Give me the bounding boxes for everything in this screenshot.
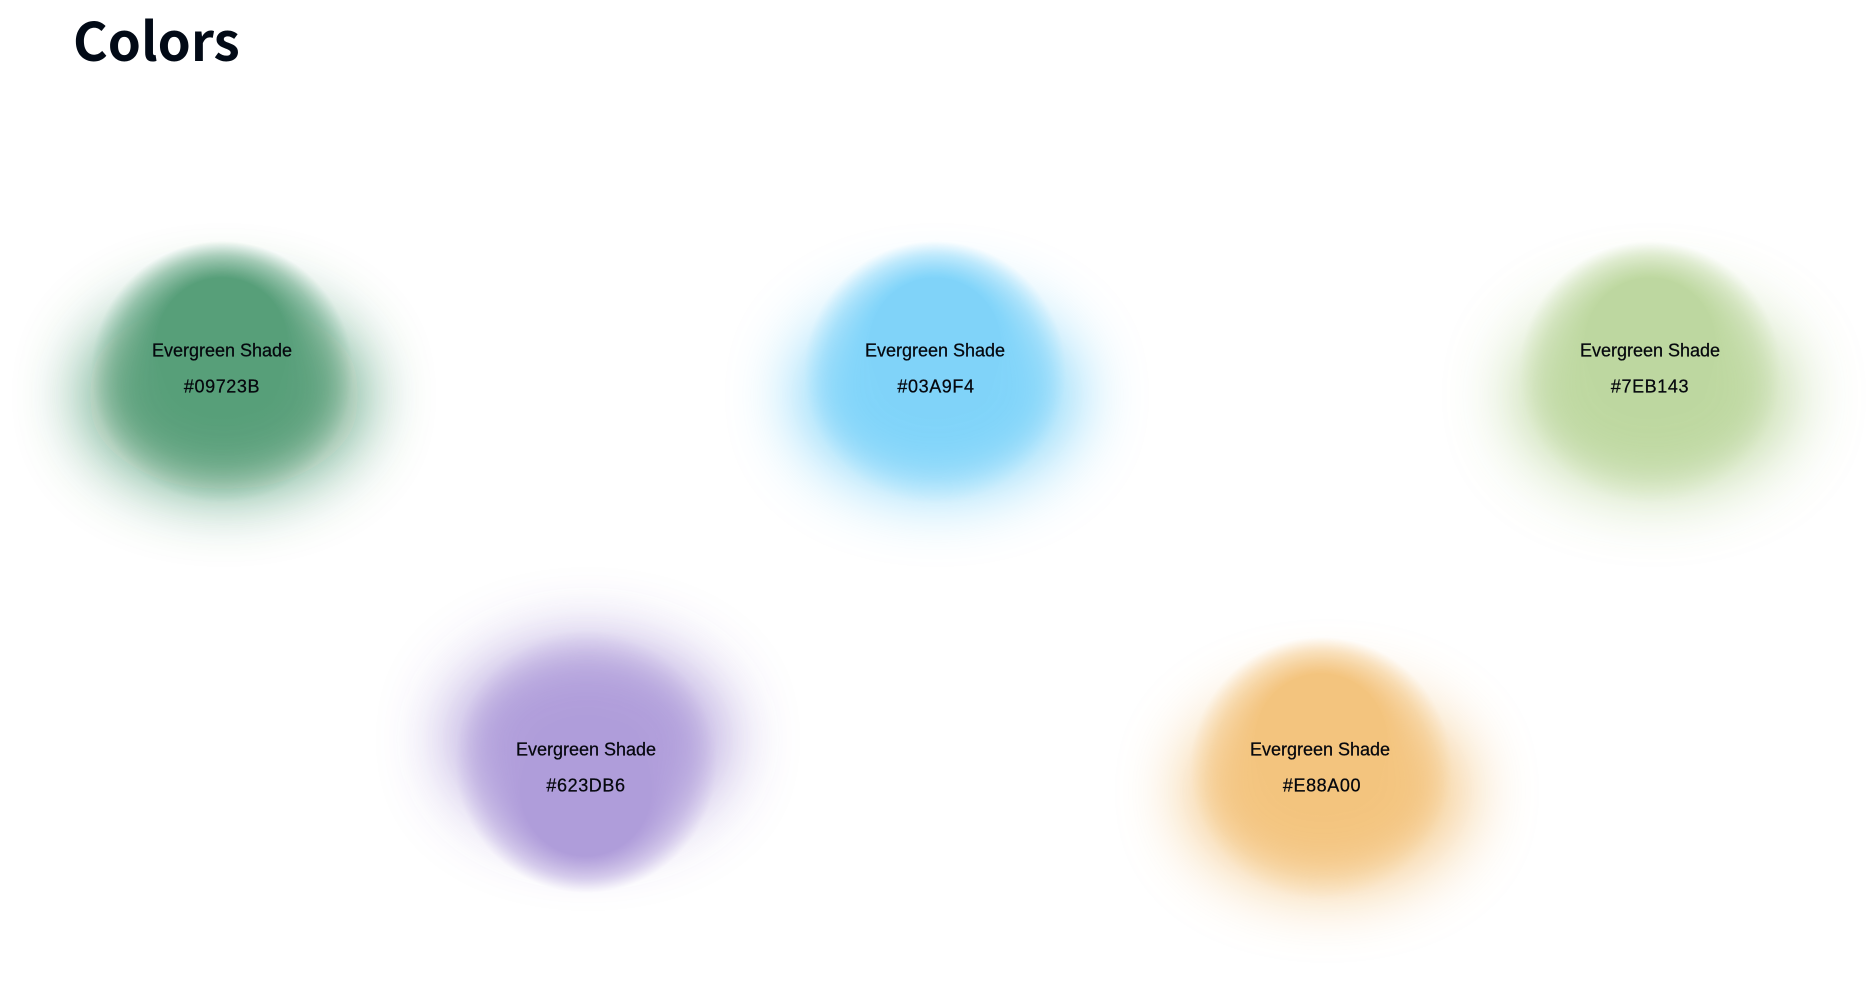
swatch: blue #03A9F4: #03A9F4 [897, 376, 975, 396]
swatch: orange #E88A00: Evergreen Shade [1250, 740, 1390, 760]
swatch: blue #03A9F4 [799, 241, 1075, 503]
swatch: light green #7EB143: #7EB143 [1611, 376, 1689, 396]
swatch: purple #623DB6: #623DB6 [546, 776, 626, 796]
swatch: orange #E88A00 [1189, 637, 1465, 899]
swatch: blue #03A9F4: Evergreen Shade [865, 340, 1005, 360]
swatch: light green #7EB143 [1516, 241, 1792, 503]
swatch: green #09723B [86, 241, 362, 503]
swatch: purple #623DB6: Evergreen Shade [516, 740, 656, 760]
swatch: orange #E88A00: #E88A00 [1283, 776, 1361, 796]
title: Colors [73, 1, 240, 77]
swatch: green #09723B: Evergreen Shade [152, 340, 292, 360]
swatch: purple #623DB6 [450, 631, 726, 893]
swatch: green #09723B: #09723B [184, 376, 260, 396]
swatch: light green #7EB143: Evergreen Shade [1580, 340, 1720, 360]
